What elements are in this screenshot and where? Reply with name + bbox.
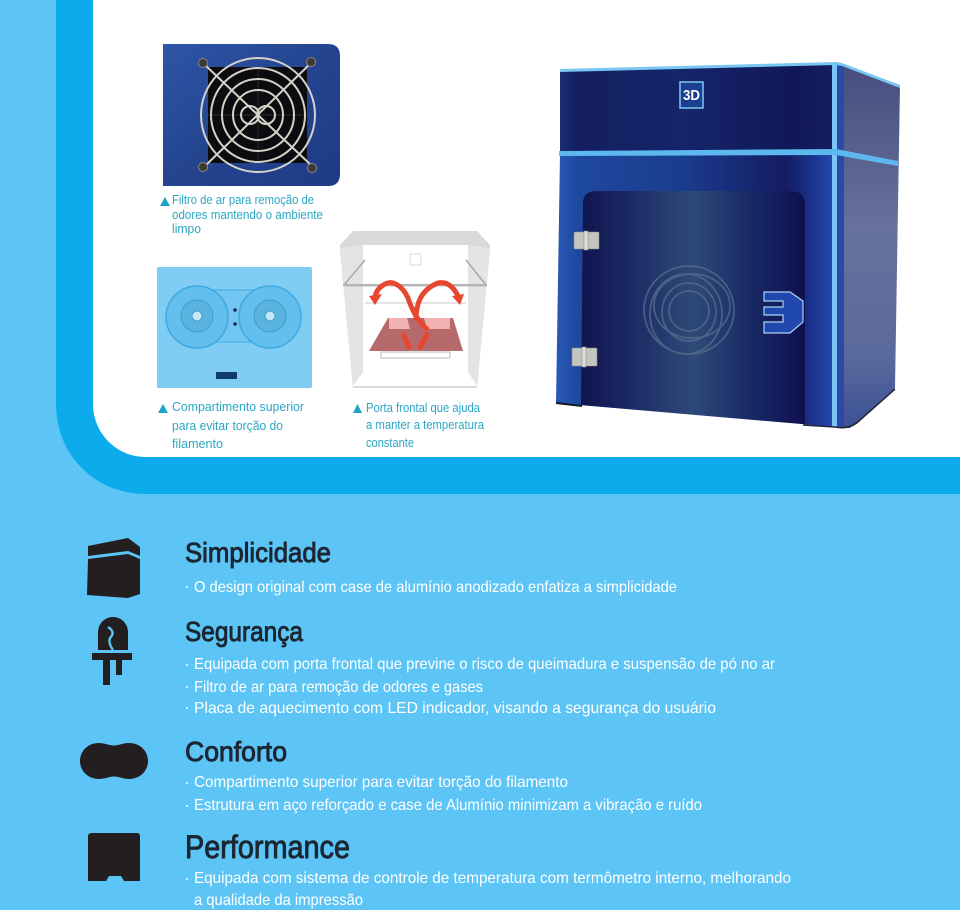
caption: top compartment: Compartimento superior xyxy=(172,399,305,414)
icon: enclosure box xyxy=(87,538,140,598)
heading: Simplicidade: Simplicidade xyxy=(185,537,331,568)
caption: air filter: Filtro de ar para remoção de xyxy=(172,192,314,207)
text: Conforto bullets xyxy=(186,774,702,814)
top white panel with blue border xyxy=(56,0,960,494)
caption: front door xyxy=(353,400,485,450)
caption: front door: a manter a temperatura xyxy=(366,417,485,432)
caption: top compartment: para evitar torção do xyxy=(172,418,283,433)
text: Conforto bullets: Estrutura em aço reforçado e case de Alumínio minimizam a vibração e ruído xyxy=(194,797,702,814)
text: Performance bullets: Equipada com sistema de controle de temperatura com termômetro interno, melhorando xyxy=(194,870,791,887)
caption: front door: Porta frontal que ajuda xyxy=(366,400,481,415)
logo badge: 3D xyxy=(683,87,700,104)
text: Segurança bullets: Placa de aquecimento com LED indicador, visando a segurança do usuário xyxy=(194,700,716,717)
text: Segurança bullets xyxy=(186,656,776,717)
caption: front door: constante xyxy=(366,435,414,450)
text: Performance bullets xyxy=(186,870,791,909)
caption: air filter xyxy=(160,192,323,236)
heading: Performance: Performance xyxy=(185,829,350,865)
door handle xyxy=(764,292,803,333)
photo: 3D printer enclosure xyxy=(556,62,900,428)
photo: front door airflow diagram xyxy=(340,231,490,388)
text: Performance bullets: a qualidade da impressão xyxy=(194,892,363,909)
heading: Segurança: Segurança xyxy=(185,616,303,647)
door logo rings xyxy=(644,266,734,354)
caption: air filter: odores mantendo o ambiente xyxy=(172,207,323,222)
logo badge xyxy=(680,82,703,108)
text: Segurança bullets: Filtro de ar para remoção de odores e gases xyxy=(194,679,483,696)
text: Conforto bullets: Compartimento superior para evitar torção do filamento xyxy=(194,774,568,791)
icon: LED xyxy=(92,617,132,685)
text: Segurança bullets: Equipada com porta frontal que previne o risco de queimadura e suspensão de pó no ar xyxy=(194,656,776,673)
heading: Conforto: Conforto xyxy=(185,736,287,767)
hinges xyxy=(572,231,599,367)
caption: air filter: limpo xyxy=(172,221,201,236)
photo: air filter fan xyxy=(163,44,340,186)
caption: top compartment: filamento xyxy=(172,436,223,451)
text: Simplicidade bullets: O design original com case de alumínio anodizado enfatiza a simplicidade xyxy=(194,579,677,596)
icon: spool compartment xyxy=(80,743,148,779)
icon: performance block xyxy=(88,833,140,881)
caption: top compartment xyxy=(158,399,305,451)
photo: top spool compartment xyxy=(157,267,312,388)
